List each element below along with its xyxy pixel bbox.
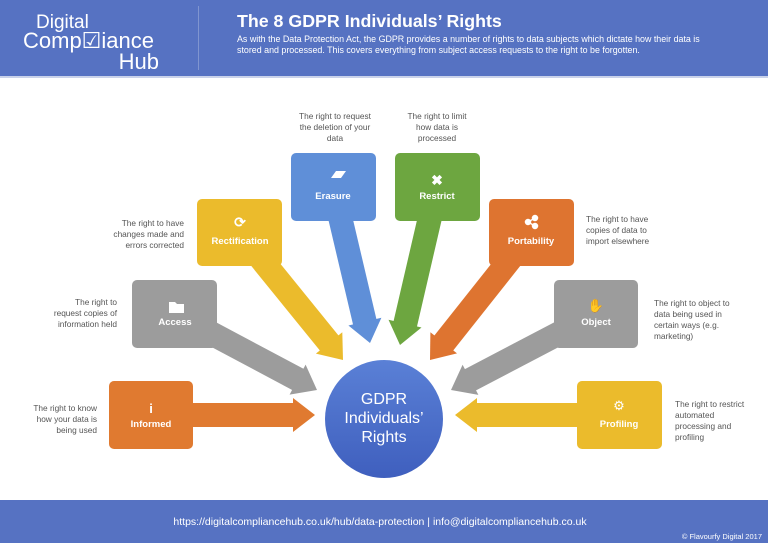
desc: restrict: The right to limit	[407, 111, 467, 121]
box: profiling: Profiling	[600, 419, 638, 430]
box: erasure	[291, 153, 376, 221]
arrow: portability	[430, 233, 531, 360]
logo: Digital	[36, 12, 89, 33]
footer: https://digitalcompliancehub.co.uk/hub/data-protection | info@digitalcompliancehub.co.uk	[173, 516, 587, 528]
box: object: ✋	[588, 298, 604, 313]
box: restrict	[395, 153, 480, 221]
intro text	[237, 34, 700, 55]
box: erasure: Erasure	[315, 191, 351, 202]
arrow: informed	[151, 398, 315, 432]
desc: profiling	[675, 399, 745, 442]
box: portability: Portability	[508, 236, 555, 247]
intro text: stored and processed. This covers everything from subject access requests to the right to be forgotten.	[237, 45, 640, 55]
box: object: Object	[581, 317, 612, 328]
box: access: Access	[158, 317, 192, 328]
logo: Hub	[119, 49, 159, 74]
desc: portability: The right to have	[586, 214, 649, 224]
box: profiling	[577, 381, 662, 449]
box: portability	[489, 199, 574, 266]
desc: rectification: errors corrected	[125, 240, 184, 250]
desc: erasure	[299, 111, 372, 143]
desc: access	[54, 297, 118, 329]
box: restrict: Restrict	[419, 191, 456, 202]
desc: profiling: The right to restrict	[675, 399, 745, 409]
arrow: erasure	[333, 187, 381, 343]
center circle: Rights	[361, 429, 407, 446]
center circle: Individuals’	[344, 410, 424, 427]
arrow: restrict	[388, 187, 437, 345]
desc: access: information held	[58, 319, 117, 329]
box: rectification: ⟳	[234, 214, 246, 230]
box: informed: i	[149, 401, 153, 416]
desc: access: The right to	[75, 297, 117, 307]
desc: informed: The right to know	[33, 403, 98, 413]
desc: object: certain ways (e.g.	[654, 320, 719, 330]
center circle	[325, 360, 443, 478]
desc: access: request copies of	[54, 308, 118, 318]
desc: restrict: processed	[418, 133, 457, 143]
desc: profiling: profiling	[675, 432, 704, 442]
box: access	[132, 280, 217, 348]
logo	[23, 12, 159, 74]
desc: object: marketing)	[654, 331, 693, 341]
desc: erasure: the deletion of your	[300, 122, 371, 132]
arrow: profiling	[455, 398, 619, 432]
desc: rectification: changes made and	[113, 229, 184, 239]
box: informed: Informed	[131, 419, 172, 430]
desc: informed: being used	[56, 425, 97, 435]
footer	[0, 500, 768, 543]
footer: © Flavourfy Digital 2017	[682, 532, 762, 541]
desc: profiling: automated	[675, 410, 715, 420]
desc: rectification	[113, 218, 184, 250]
box: rectification	[197, 199, 282, 266]
box: profiling: ⚙	[613, 398, 625, 413]
arrow: object	[451, 314, 596, 395]
arrow: rectification	[240, 233, 343, 360]
desc: rectification: The right to have	[122, 218, 184, 228]
box: restrict: ✖	[431, 172, 443, 188]
desc: object: The right to object to	[654, 298, 730, 308]
desc: profiling: processing and	[675, 421, 732, 431]
box: informed	[109, 381, 193, 449]
desc: erasure: data	[327, 133, 343, 143]
center circle: GDPR	[361, 391, 407, 408]
desc: informed: how your data is	[37, 414, 97, 424]
desc: restrict: how data is	[416, 122, 458, 132]
box: rectification: Rectification	[211, 236, 269, 247]
desc: informed	[33, 403, 98, 435]
arrow: access	[175, 314, 317, 395]
desc: restrict	[407, 111, 467, 143]
desc: portability	[586, 214, 650, 246]
desc: object	[654, 298, 730, 341]
desc: erasure: The right to request	[299, 111, 372, 121]
header band	[0, 0, 768, 78]
desc: portability: copies of data to	[586, 225, 647, 235]
intro text: As with the Data Protection Act, the GDPR provides a number of rights to data subjects which dictate how their data is	[237, 34, 700, 44]
desc: portability: import elsewhere	[586, 236, 650, 246]
title: The 8 GDPR Individuals’ Rights	[237, 11, 502, 31]
logo: Comp☑iance	[23, 28, 154, 53]
box: object	[554, 280, 638, 348]
desc: object: data being used in	[654, 309, 722, 319]
